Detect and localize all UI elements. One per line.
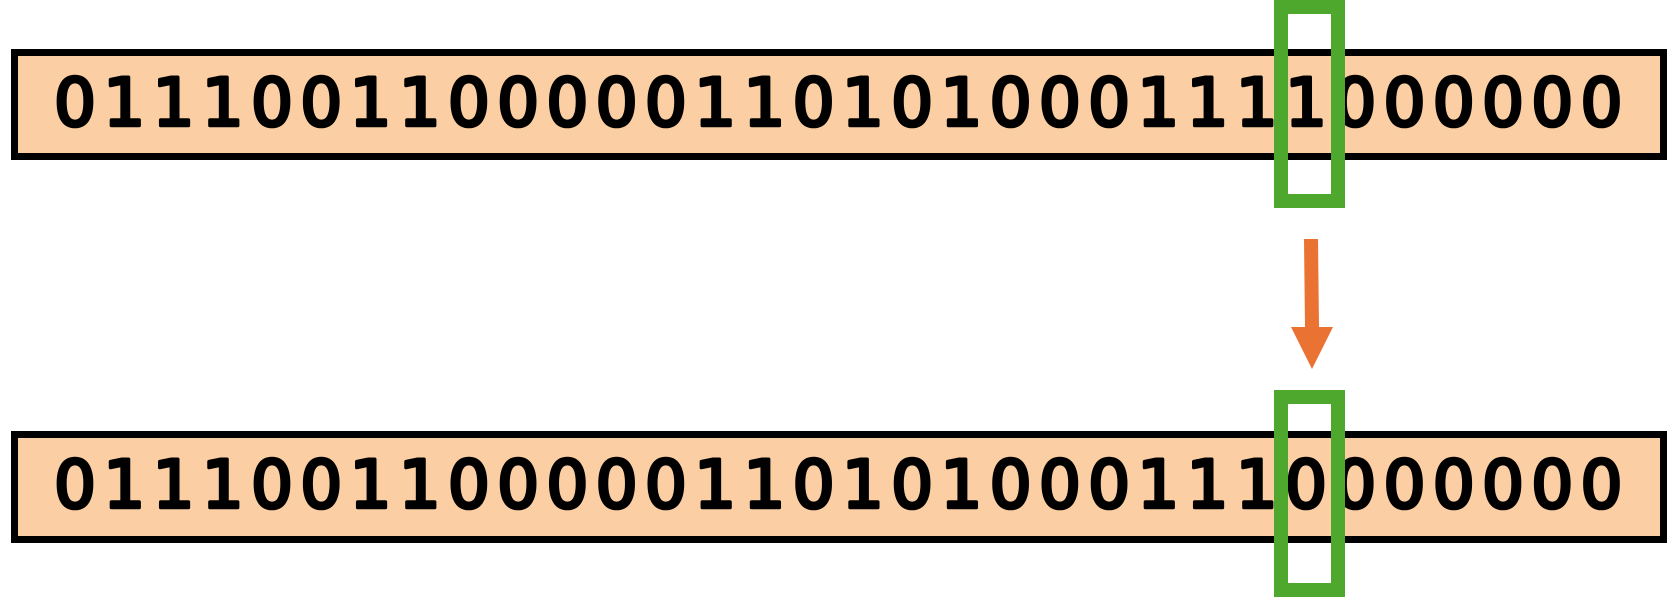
top binary string: 01110011000001101010001111000000 — [54, 64, 1630, 142]
top binary register — [14, 52, 1664, 156]
top green highlight box — [1281, 7, 1338, 201]
arrow: bit flip direction — [1291, 239, 1333, 369]
bottom binary string: 01110011000001101010001110000000 — [54, 446, 1630, 524]
bottom binary register — [14, 434, 1664, 540]
bottom green highlight box — [1281, 397, 1338, 590]
